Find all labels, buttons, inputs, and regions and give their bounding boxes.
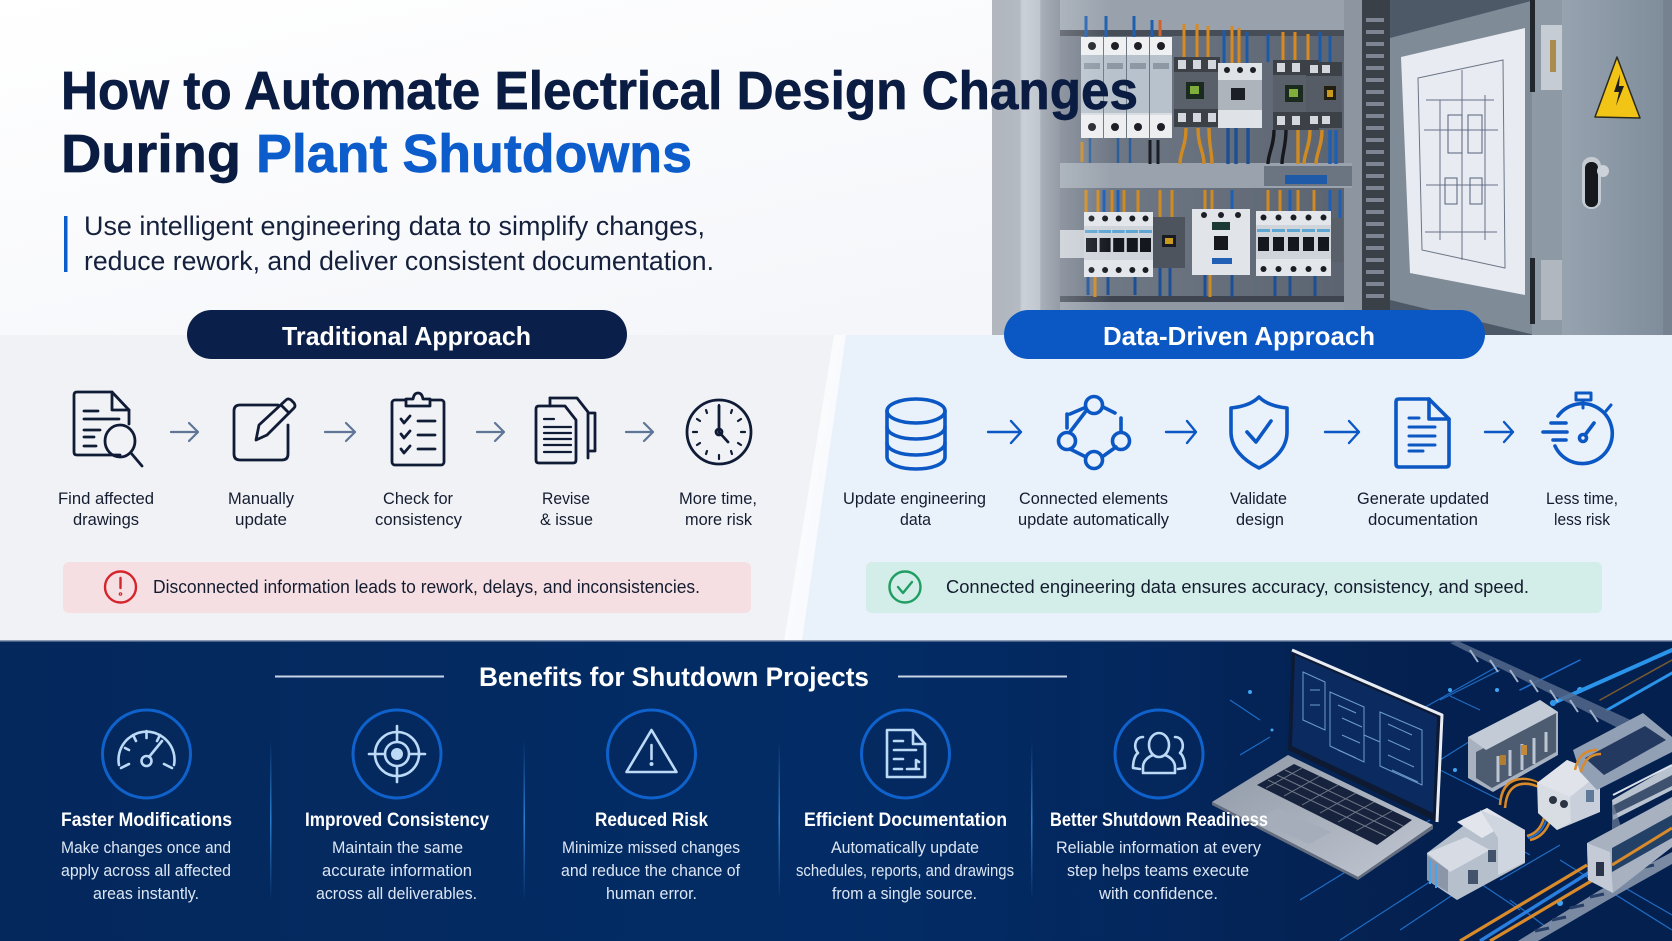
arrow	[171, 423, 198, 441]
step: validate design: design	[1236, 510, 1284, 529]
benefit: faster modifications: areas instantly.	[93, 885, 199, 903]
step: less time, less risk: less risk	[1554, 510, 1610, 529]
rack block C	[1427, 808, 1525, 900]
benefit: better shutdown readiness: Better Shutdown Readiness	[1050, 810, 1268, 831]
step: check for consistency	[375, 393, 462, 529]
benefit: faster modifications	[61, 710, 232, 903]
arrow	[325, 423, 355, 441]
arrow	[988, 421, 1021, 443]
cabinet handle	[1582, 157, 1609, 209]
rack block B	[1537, 760, 1600, 830]
cables	[1460, 865, 1598, 941]
subtitle with accent bar: Use intelligent engineering data to simplify changes,	[84, 211, 705, 241]
pill: data-driven approach: Data-Driven Approach	[1103, 321, 1375, 351]
icon: red exclamation	[105, 572, 136, 602]
pill: data-driven approach	[1004, 310, 1485, 359]
title: Plant Shutdowns	[256, 124, 692, 184]
benefit: efficient documentation: schedules, reports, and drawings	[796, 862, 1014, 880]
bottom-row breakers	[1060, 209, 1343, 277]
benefit: improved consistency: across all deliverables.	[316, 885, 477, 903]
icon: database	[887, 399, 945, 469]
benefit: reduced risk: Reduced Risk	[595, 810, 708, 831]
benefit: reduced risk: Minimize missed changes	[562, 839, 740, 857]
benefit: reduced risk: human error.	[606, 885, 697, 903]
title: During	[61, 124, 241, 184]
title	[61, 61, 1138, 184]
icon: clipboard checklist	[392, 393, 444, 465]
icon: warning triangle	[608, 710, 696, 798]
icon: team of people	[1115, 710, 1203, 798]
step: revise and issue: Revise	[542, 489, 590, 508]
arrow	[1166, 421, 1196, 443]
step: less time, less risk	[1543, 393, 1618, 529]
benefit: better shutdown readiness: Reliable information at every	[1056, 839, 1262, 857]
illustration: laptop with schematic	[1212, 650, 1442, 880]
benefit: improved consistency	[305, 710, 489, 903]
title: How to Automate Electrical Design Changes	[61, 61, 1138, 121]
step: manually update: Manually	[228, 489, 294, 508]
subtitle with accent bar: reduce rework, and deliver consistent documentation.	[84, 246, 714, 276]
contactors	[1174, 57, 1342, 130]
arrow	[1325, 421, 1359, 443]
callout: disconnected information: Disconnected information leads to rework, delays, and inconsistencies.	[153, 577, 700, 597]
icon: pencil on pad	[234, 399, 295, 460]
step: generate documentation: documentation	[1368, 510, 1478, 529]
step: generate documentation	[1357, 399, 1489, 529]
step: more time, more risk: More time,	[679, 489, 757, 508]
callout: connected engineering data	[866, 562, 1602, 613]
benefit: faster modifications: Make changes once and	[61, 839, 231, 857]
benefit: improved consistency: Maintain the same	[332, 839, 463, 857]
photo: open electrical cabinet	[992, 0, 1672, 335]
top-row breakers	[1081, 37, 1172, 138]
screen schematic	[1303, 672, 1422, 785]
icon: shield check	[1231, 397, 1287, 468]
callout: disconnected information	[63, 562, 751, 613]
step: revise and issue	[536, 398, 595, 529]
arrow	[626, 423, 653, 441]
benefit: improved consistency: accurate information	[322, 862, 472, 880]
step: more time, more risk: more risk	[685, 510, 752, 529]
truss	[1450, 641, 1672, 941]
step: check for consistency: Check for	[383, 489, 453, 508]
benefit: efficient documentation: Efficient Documentation	[804, 810, 1007, 831]
step: find affected drawings	[58, 392, 154, 529]
step: check for consistency: consistency	[375, 510, 462, 529]
callout: connected engineering data: Connected engineering data ensures accuracy, consistency, and speed.	[946, 577, 1529, 597]
benefit: better shutdown readiness	[1050, 710, 1268, 903]
benefit: reduced risk	[561, 710, 740, 903]
orange cable loops	[1500, 779, 1541, 808]
icon: stopwatch	[1543, 393, 1612, 464]
step: find affected drawings: Find affected	[58, 489, 154, 508]
step: manually update	[228, 399, 295, 529]
step: connected elements	[1018, 396, 1169, 529]
panel: data-driven approach	[789, 335, 1672, 641]
benefit: improved consistency: Improved Consistency	[305, 810, 489, 831]
step: revise and issue: & issue	[540, 510, 593, 529]
step: manually update: update	[235, 510, 287, 529]
step: update engineering data	[843, 399, 986, 529]
icon: document	[1396, 399, 1449, 467]
rail right	[1573, 713, 1672, 893]
icon: speed gauge	[102, 710, 190, 798]
step: more time, more risk	[679, 400, 757, 529]
benefit: faster modifications: apply across all affected	[61, 862, 231, 880]
diagonal panel divider	[784, 335, 846, 641]
icon: stacked documents	[536, 398, 595, 463]
step: validate design: Validate	[1230, 489, 1287, 508]
icon: green check	[890, 572, 920, 602]
benefit dividers	[270, 740, 1032, 900]
icon: high voltage warning sign	[1595, 57, 1640, 118]
panel: benefits band	[0, 640, 1672, 941]
benefit: better shutdown readiness: step helps teams execute	[1067, 862, 1249, 880]
illustration: isometric electrical network	[1150, 641, 1672, 941]
step: find affected drawings: drawings	[73, 510, 139, 529]
step: less time, less risk: Less time,	[1546, 489, 1618, 508]
benefit: efficient documentation	[796, 710, 1014, 903]
step: connected elements: Connected elements	[1019, 489, 1168, 508]
benefit: efficient documentation: Automatically update	[831, 839, 979, 857]
step: generate documentation: Generate updated	[1357, 489, 1489, 508]
benefit: efficient documentation: from a single source.	[832, 885, 977, 903]
arrow	[477, 423, 504, 441]
icon: target	[353, 710, 441, 798]
subtitle with accent bar	[64, 211, 714, 276]
step: update engineering data: Update engineering	[843, 489, 986, 508]
icon: clock	[687, 400, 751, 464]
benefit: reduced risk: and reduce the chance of	[561, 862, 740, 880]
arrow	[1485, 422, 1513, 442]
pill: traditional approach: Traditional Approach	[282, 321, 531, 351]
step: connected elements: update automatically	[1018, 510, 1169, 529]
hero background	[0, 0, 1672, 336]
heading: benefits: Benefits for Shutdown Projects	[479, 662, 869, 692]
benefit: better shutdown readiness: with confidence.	[1098, 885, 1218, 903]
benefit: faster modifications: Faster Modifications	[61, 810, 232, 831]
step: validate design	[1230, 397, 1287, 529]
icon: document with magnifier	[74, 392, 142, 466]
icon: report document	[862, 710, 950, 798]
panel: traditional approach	[0, 335, 1672, 641]
door with schematic	[1390, 0, 1672, 335]
step: update engineering data: data	[900, 510, 932, 529]
icon: connected node ring	[1058, 396, 1130, 468]
rack block A	[1468, 700, 1558, 792]
pill: traditional approach	[187, 310, 627, 359]
